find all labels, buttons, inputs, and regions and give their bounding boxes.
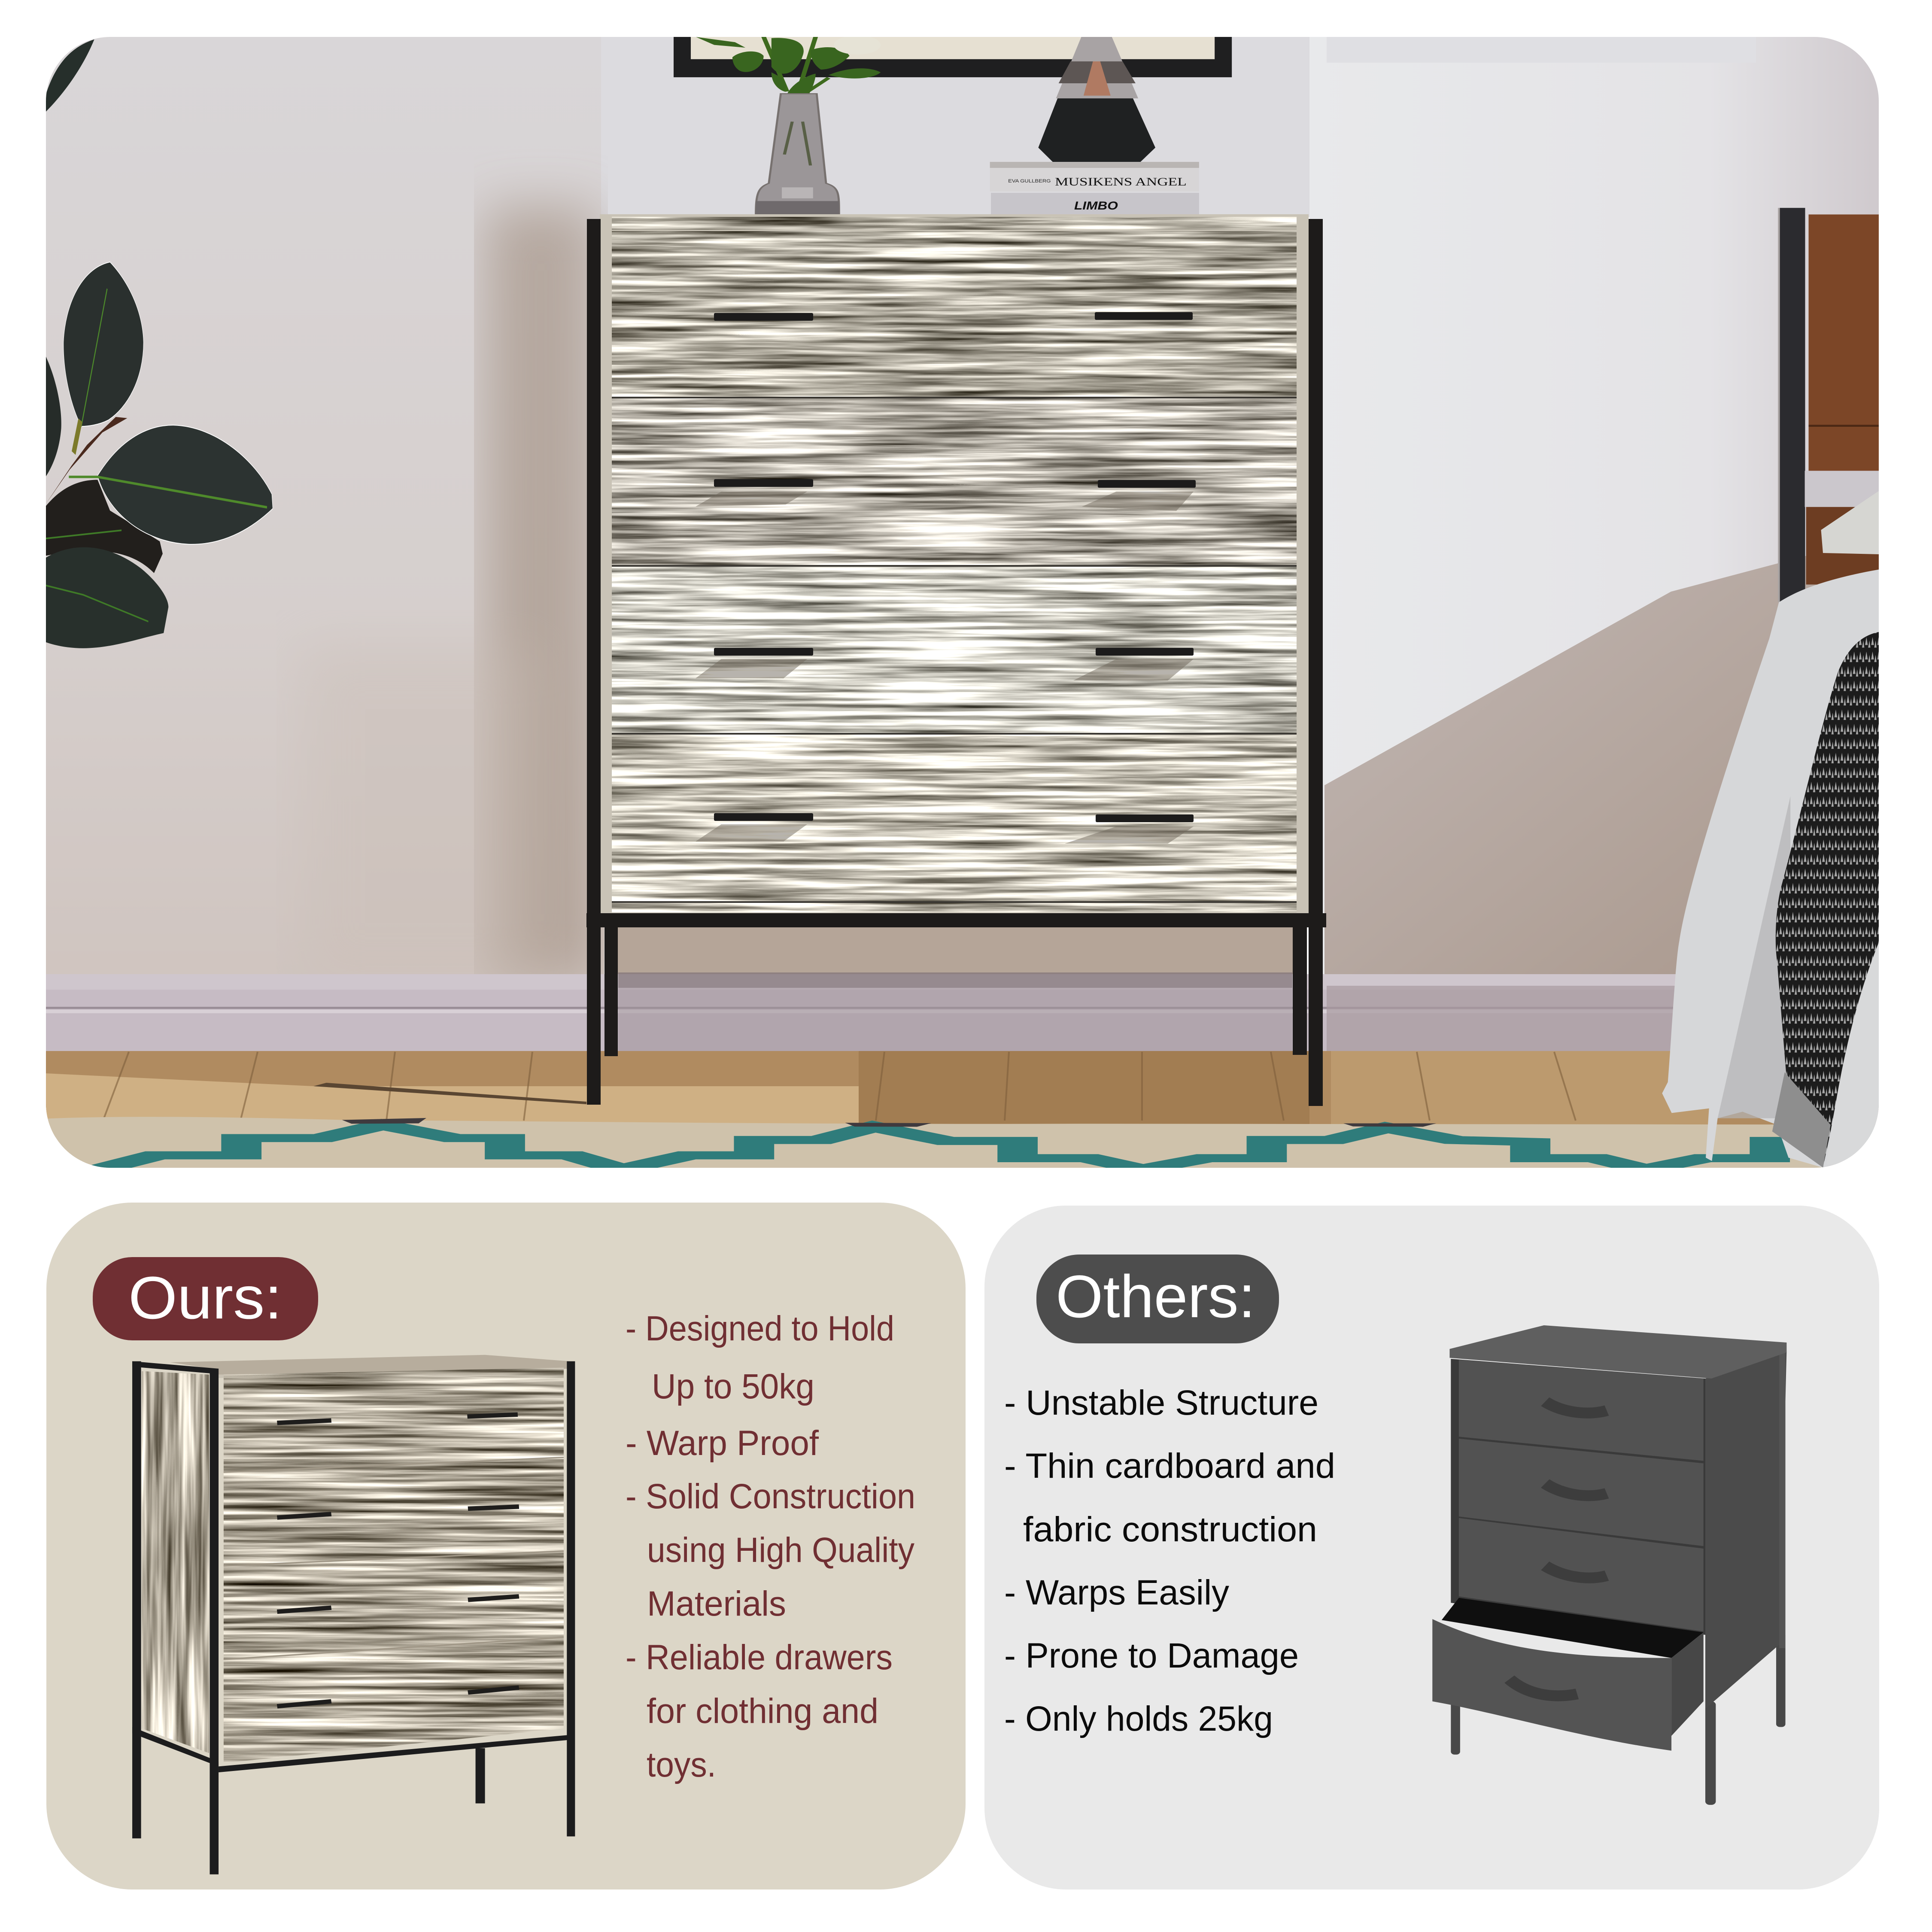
product image: grey fabric drawers [1432,1325,1786,1805]
wall picture frame [674,34,1232,77]
drawer handles [1510,1402,1607,1696]
stacked books [990,162,1199,218]
main chest of drawers in room [586,214,1326,1106]
feature list: ours: Materials [647,1584,786,1623]
feature list: ours: using High Quality [647,1531,914,1570]
flowers in glass vase [696,35,881,216]
panel background [984,1206,1879,1889]
feature list: ours: - Solid Construction [626,1477,915,1516]
feature list: others: - Prone to Damage [1004,1636,1299,1675]
panel: others [984,1206,1879,1889]
legs [1451,1632,1786,1805]
handle shadows [696,492,1194,844]
stacked books: MUSIKENS ANGEL [1055,175,1187,188]
hero photo panel: bedroom scene [6,34,1932,1173]
frame [132,1361,575,1874]
baseboard [46,972,1879,1052]
wood floor [46,1051,1879,1137]
drawer handles [714,312,1196,822]
feature list: ours: - Reliable drawers [626,1638,893,1677]
black metal frame and legs [586,219,1326,1106]
panel background [46,1203,966,1889]
black hourglass lamp [1038,34,1155,164]
stacked books: LIMBO [1074,199,1118,212]
heading pill: Ours: Ours: [128,1264,282,1331]
feature list: ours: for clothing and [647,1692,878,1731]
heading pill: Others [1036,1255,1279,1343]
panel: ours [46,1203,966,1889]
feature list: ours: - Warp Proof [626,1424,819,1463]
rug with teal zigzag [6,1116,1932,1173]
feature list: others [1004,1383,1335,1738]
heading pill: Ours [93,1257,318,1340]
product image: oak chest with black frame [132,1355,575,1874]
top [1449,1325,1786,1379]
heading pill: Others: Others: [1056,1263,1255,1330]
feature list: ours: Up to 50kg [652,1367,814,1406]
feature list: others: fabric construction [1023,1510,1317,1549]
closed drawers [1459,1360,1704,1631]
feature list: others: - Only holds 25kg [1004,1699,1273,1738]
feature list: ours: - Designed to Hold [626,1309,894,1348]
feature list: ours: toys. [647,1745,716,1784]
body side [1705,1352,1786,1709]
handles [277,1415,519,1706]
drawer fronts with wood grain [612,217,1297,912]
cabinet top and sides [600,214,1309,913]
stacked books: EVA GULLBERG [1008,178,1051,184]
open drawer [1442,1598,1704,1658]
bed with headboard and throw [1662,208,1880,1171]
drawer seams [612,398,1297,902]
feature list: others: - Unstable Structure [1004,1383,1318,1422]
wall [46,37,1880,999]
feature list: ours [626,1309,915,1784]
rubber plant leaves [46,39,273,648]
feature list: others: - Thin cardboard and [1004,1446,1335,1485]
feature list: others: - Warps Easily [1004,1573,1229,1612]
